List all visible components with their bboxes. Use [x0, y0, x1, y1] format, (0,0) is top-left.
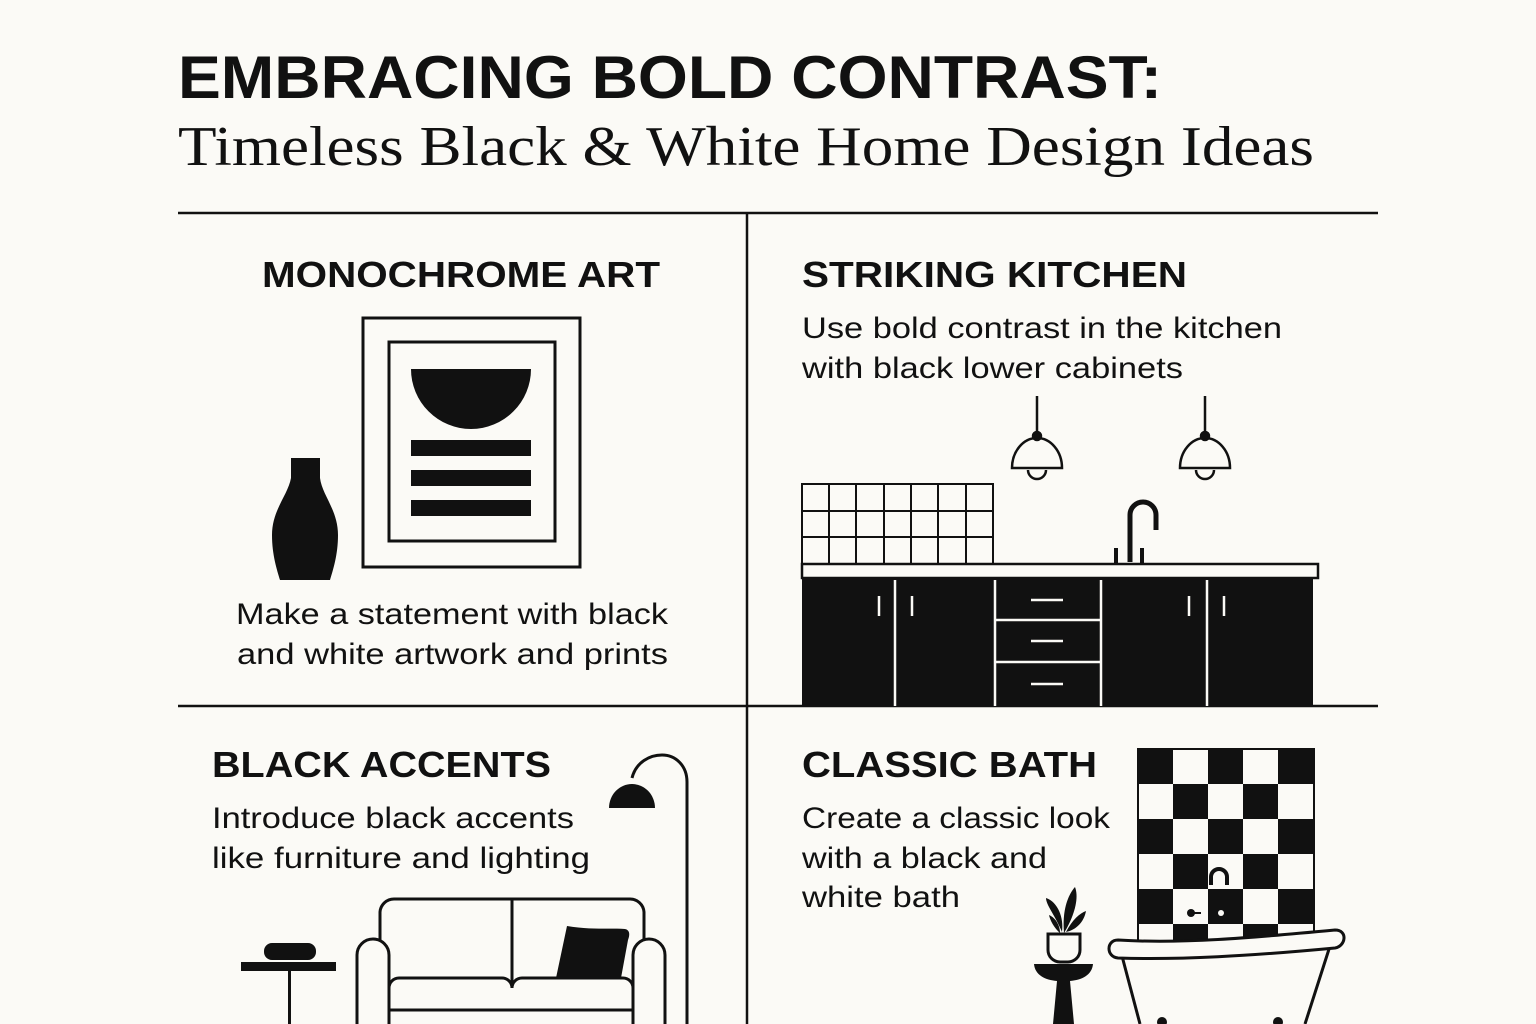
text: art description: Make a statement with black — [236, 598, 669, 631]
icon: framed artwork — [363, 318, 580, 567]
text: kitchen description: Use bold contrast in the kitchen — [802, 312, 1282, 345]
text: kitchen description — [801, 312, 1282, 385]
heading: classic bath: CLASSIC BATH — [802, 744, 1097, 785]
heading: black accents: BLACK ACCENTS — [212, 744, 551, 785]
panel: striking kitchen — [801, 254, 1318, 706]
icon: checkered tiles — [1138, 749, 1314, 941]
icon: backsplash tiles — [802, 484, 993, 564]
icon: counter and cabinets — [802, 564, 1318, 706]
icon: faucet — [1130, 502, 1156, 562]
title: EMBRACING BOLD CONTRAST: — [178, 44, 1162, 111]
title — [178, 44, 1314, 178]
icon: sofa — [357, 899, 665, 1024]
text: accents description — [212, 802, 590, 875]
icon: plant on stand — [1034, 887, 1093, 1024]
title: Timeless Black & White Home Design Ideas — [178, 116, 1314, 178]
text: accents description: Introduce black accents — [212, 802, 574, 835]
icon: floor lamp — [609, 755, 687, 1024]
heading: striking kitchen: STRIKING KITCHEN — [802, 254, 1187, 295]
text: bath description: with a black and — [801, 842, 1047, 875]
text: bath description: Create a classic look — [802, 802, 1111, 835]
panel: classic bath — [801, 744, 1344, 1024]
icon: side table — [241, 943, 336, 1024]
text: art description — [236, 598, 669, 671]
text: bath description: white bath — [801, 881, 960, 914]
text: accents description: like furniture and lighting — [212, 842, 590, 875]
icon: vase — [272, 458, 338, 580]
icon: pendant lamps — [1012, 396, 1230, 479]
heading: monochrome art: MONOCHROME ART — [262, 254, 660, 295]
panel: monochrome art — [236, 254, 669, 671]
icon: bathtub — [1109, 930, 1344, 1024]
panel: black accents — [212, 744, 687, 1024]
text: bath description — [801, 802, 1111, 914]
text: kitchen description: with black lower cabinets — [801, 352, 1183, 385]
text: art description: and white artwork and prints — [237, 638, 668, 671]
